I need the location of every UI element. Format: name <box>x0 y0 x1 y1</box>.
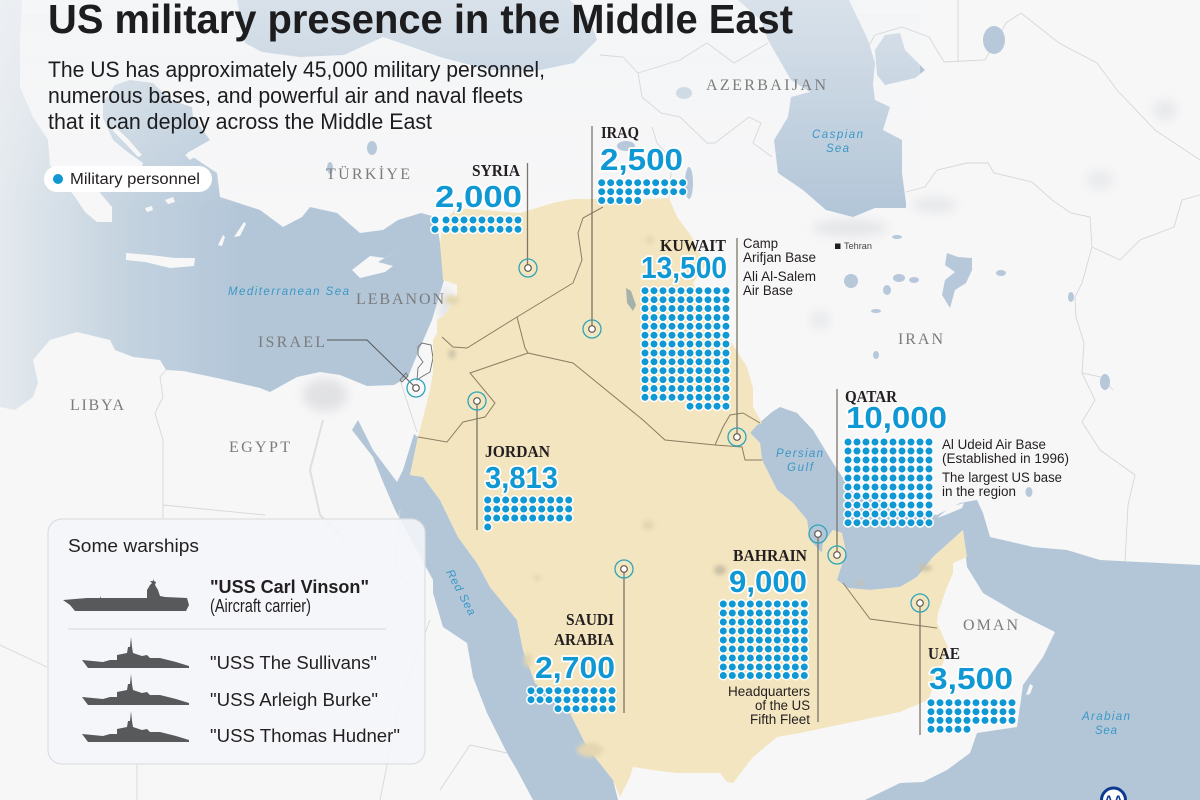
subtitle: that it can deploy across the Middle East <box>48 109 432 134</box>
stat: Saudi Arabia: 2,700 <box>535 650 615 685</box>
panel: some warships: "USS The Sullivans" <box>210 653 377 673</box>
stat: Kuwait: Arifjan Base <box>743 250 816 265</box>
base location pins <box>407 259 929 612</box>
stat: Bahrain <box>723 546 810 727</box>
sea names: Sea <box>1095 725 1117 737</box>
stat: Bahrain: 9,000 <box>729 564 807 599</box>
sea names: Persian <box>776 448 823 460</box>
stat: Qatar: in the region <box>942 484 1016 499</box>
highlighted countries <box>410 198 967 797</box>
sea names: Caspian <box>812 129 863 141</box>
leader lines <box>327 126 920 735</box>
stat: Kuwait: KUWAIT <box>660 236 726 255</box>
stat: Bahrain: Headquarters <box>728 684 810 699</box>
sea names: Sea <box>826 143 849 155</box>
stat: Saudi Arabia: ARABIA <box>554 630 614 649</box>
panel: some warships: "USS Thomas Hudner" <box>210 726 400 746</box>
stat: Bahrain: BAHRAIN <box>733 546 807 565</box>
stat: Qatar: The largest US base <box>942 470 1062 485</box>
neighbouring country names: EGYPT <box>229 439 290 456</box>
stat: Kuwait: Air Base <box>743 283 793 298</box>
sea names: Red Sea <box>443 568 477 618</box>
land relief <box>303 100 1177 411</box>
stat: Iraq: 2,500 <box>600 142 683 177</box>
stat: Kuwait <box>641 236 816 406</box>
stat: Bahrain: Fifth Fleet <box>750 712 810 727</box>
stat: Syria: SYRIA <box>472 161 520 180</box>
legend: military personnel: Military personnel <box>70 171 200 188</box>
neighbouring country names: OMAN <box>963 617 1018 634</box>
stat: Kuwait: 13,500 <box>641 250 727 285</box>
panel: some warships <box>48 519 425 764</box>
stat: Qatar: QATAR <box>845 387 898 406</box>
stat: UAE <box>928 644 1013 729</box>
stat: Syria <box>435 161 522 229</box>
stat: Iraq <box>600 123 683 200</box>
subtitle: The US has approximately 45,000 military personnel, <box>48 57 545 82</box>
stat: Saudi Arabia: SAUDI <box>566 610 614 629</box>
stat: UAE: 3,500 <box>929 661 1013 696</box>
neighbouring country names: ISRAEL <box>258 334 325 351</box>
stat: Qatar: 10,000 <box>846 400 947 435</box>
stat: Bahrain: of the US <box>755 698 810 713</box>
stat: Kuwait: Camp <box>743 236 778 251</box>
stat: Kuwait: Ali Al-Salem <box>743 269 816 284</box>
neighbouring country names: TÜRKİYE <box>326 165 410 183</box>
panel: some warships: Some warships <box>68 536 199 556</box>
stat: Saudi Arabia <box>531 610 615 709</box>
panel: some warships: (Aircraft carrier) <box>210 596 311 616</box>
sea names: Gulf <box>787 462 815 474</box>
legend: military personnel <box>44 166 212 192</box>
stat: Qatar <box>845 387 1069 523</box>
sea names: Arabian <box>1081 711 1130 723</box>
logo: AA <box>1102 788 1126 800</box>
neighbouring country names: IRAN <box>898 331 943 348</box>
stat: Jordan: 3,813 <box>485 460 558 495</box>
stat: Syria: 2,000 <box>435 179 522 214</box>
neighbouring country names: LEBANON <box>356 291 444 308</box>
Tehran marker: Tehran <box>844 241 872 252</box>
subtitle: numerous bases, and powerful air and naval fleets <box>48 83 523 108</box>
stat: Jordan: JORDAN <box>485 442 550 461</box>
stat: Qatar: Al Udeid Air Base <box>942 437 1046 452</box>
sea names: Mediterranean Sea <box>228 286 349 298</box>
stat: Qatar: (Established in 1996) <box>942 451 1069 466</box>
subtitle <box>48 57 545 134</box>
stat: Jordan <box>485 442 569 527</box>
stat: UAE: UAE <box>928 644 960 663</box>
neighbouring country names: LIBYA <box>70 397 124 414</box>
neighbouring country names <box>70 77 1018 634</box>
stat: Iraq: IRAQ <box>601 123 639 142</box>
panel: some warships: "USS Carl Vinson" <box>210 577 369 597</box>
panel: some warships: "USS Arleigh Burke" <box>210 690 378 710</box>
sea names <box>228 129 1130 737</box>
neighbouring country names: AZERBAIJAN <box>706 77 826 94</box>
